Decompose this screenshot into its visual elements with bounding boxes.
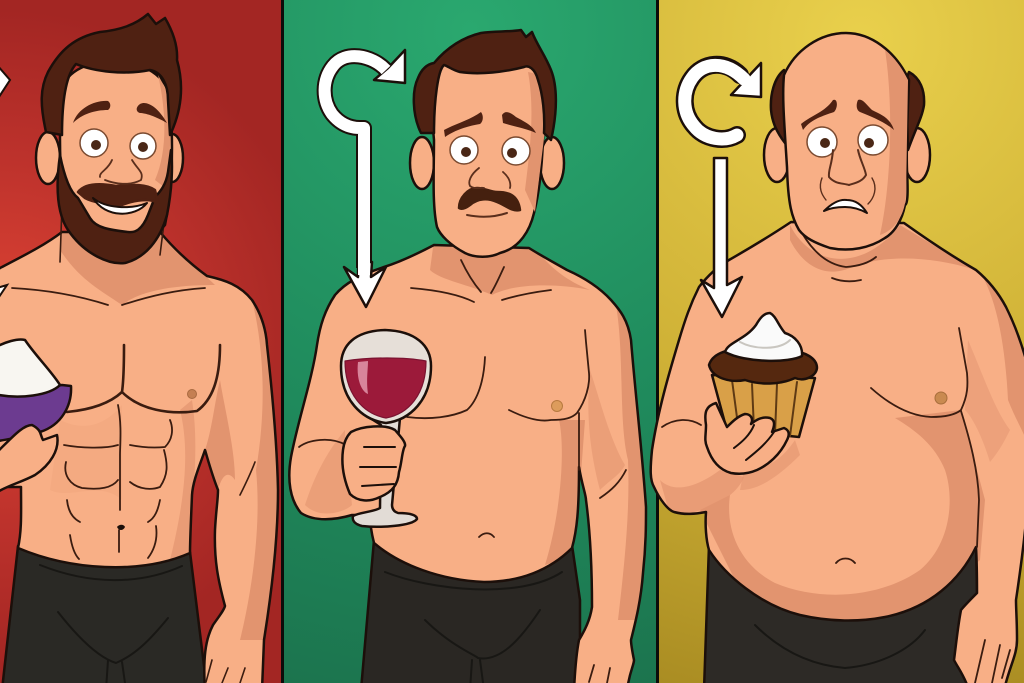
head bbox=[783, 33, 909, 250]
panel: red background bbox=[0, 0, 281, 683]
hand holding bowl bbox=[0, 425, 58, 494]
pants bbox=[2, 546, 207, 683]
wine glass bbox=[341, 330, 431, 527]
eyes bbox=[807, 125, 888, 157]
figure: muscular man bbox=[0, 14, 290, 683]
face bbox=[433, 62, 545, 257]
moustache bbox=[78, 184, 158, 205]
chest and belly lines bbox=[299, 260, 626, 683]
chest and abs lines bbox=[12, 288, 220, 559]
moustache bbox=[459, 188, 520, 210]
beard bbox=[58, 150, 172, 263]
cupcake bbox=[709, 313, 817, 437]
hair bbox=[414, 30, 556, 140]
ears bbox=[764, 128, 930, 182]
panel: yellow background bbox=[659, 0, 1024, 683]
ears bbox=[36, 132, 183, 184]
pants bbox=[361, 540, 580, 683]
head shadow bbox=[880, 50, 908, 235]
nose bbox=[100, 160, 142, 184]
chest and belly lines bbox=[662, 233, 1010, 683]
figure: heavy man bbox=[651, 33, 1024, 683]
arm and torso bbox=[651, 222, 1024, 683]
figure: average man bbox=[289, 30, 660, 683]
smile bbox=[93, 198, 147, 214]
arrow: green panel loop and down arrow bbox=[325, 50, 405, 307]
eyes bbox=[80, 129, 156, 159]
eyes bbox=[450, 136, 530, 165]
frown bbox=[824, 200, 867, 213]
forearm lines bbox=[206, 462, 255, 683]
ears bbox=[410, 137, 564, 189]
brows bbox=[801, 100, 894, 130]
neck bbox=[60, 205, 165, 262]
pants bbox=[704, 545, 980, 683]
whipped cream bbox=[0, 339, 60, 397]
hand holding glass bbox=[342, 426, 405, 500]
nose bbox=[829, 150, 866, 185]
face shadow bbox=[525, 72, 545, 212]
face shadow bbox=[155, 75, 172, 190]
side hair bbox=[771, 70, 924, 150]
torso and arm bbox=[0, 225, 290, 683]
bowl bbox=[0, 385, 71, 442]
arm and torso bbox=[289, 240, 660, 683]
brows bbox=[73, 101, 167, 123]
hair bbox=[42, 14, 181, 135]
face bbox=[60, 61, 172, 246]
nose bbox=[469, 168, 510, 188]
brows bbox=[444, 112, 536, 137]
arrow: red panel edge fragments bbox=[0, 65, 10, 300]
hand holding cupcake bbox=[705, 403, 789, 474]
arrow: yellow panel loop and down arrow bbox=[685, 63, 761, 317]
cheek lines bbox=[820, 178, 875, 204]
panel: green background bbox=[284, 0, 656, 683]
mouth bbox=[467, 213, 507, 217]
